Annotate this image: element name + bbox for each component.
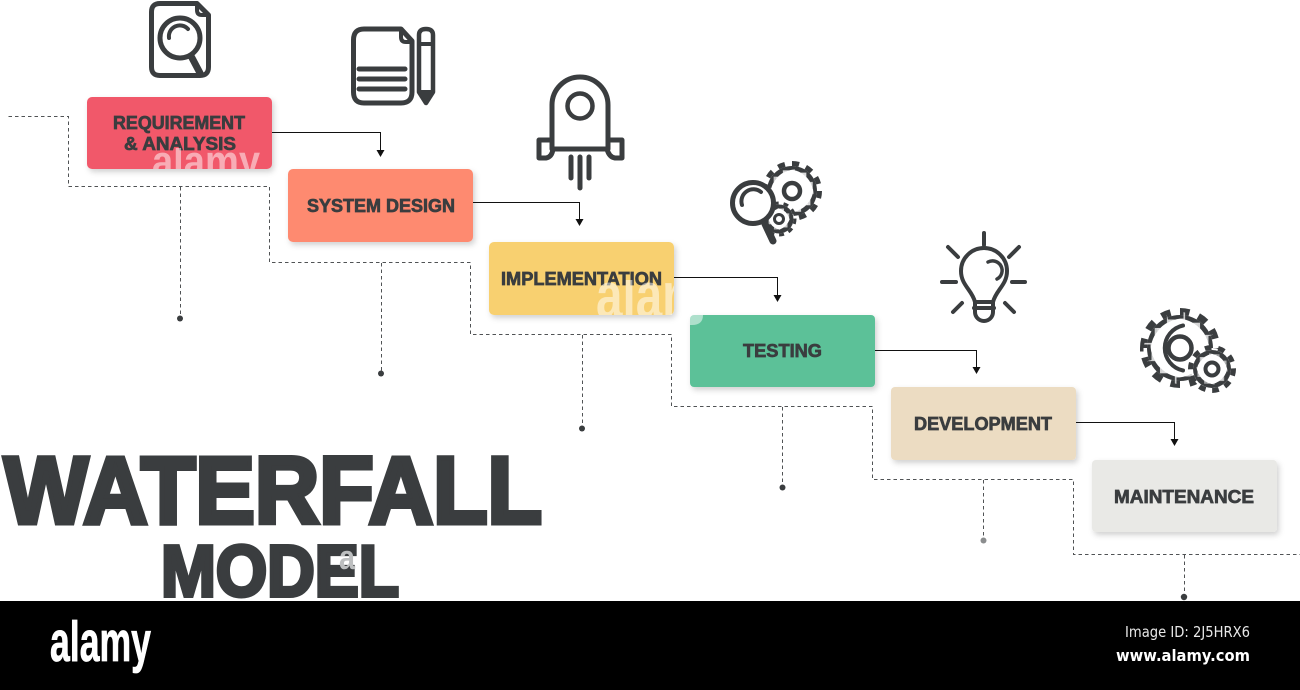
- panel: requirement and analysis: [86, 97, 276, 174]
- panel: system design: [288, 169, 473, 242]
- panel: requirement and analysis: REQUIREMENT: [113, 113, 245, 133]
- panel: development: DEVELOPMENT: [914, 414, 1052, 434]
- title line: model: MODEL: [161, 532, 399, 612]
- panel: development: [891, 387, 1076, 460]
- title: [4, 438, 542, 612]
- icon: gears: [1144, 312, 1234, 390]
- footer logo: alamy: [50, 610, 151, 674]
- stage 1 dashed drop line with dot: [177, 187, 183, 322]
- stage 4 dashed drop line with dot: [780, 407, 786, 490]
- arrow: testing to development: [875, 350, 980, 374]
- icon: magnifier with gears: [732, 164, 820, 241]
- stage 2 dashed drop line with dot: [378, 263, 384, 376]
- panel: testing: [690, 315, 875, 387]
- arrow: requirement to system design: [272, 132, 384, 157]
- footer url: www.alamy.com: [1116, 646, 1250, 665]
- panel: requirement and analysis: alamy: [152, 137, 260, 186]
- stage 5 dashed drop line with dot: [980, 480, 986, 544]
- panel: maintenance: [1092, 460, 1277, 532]
- panel: maintenance: MAINTENANCE: [1114, 487, 1254, 507]
- footer bar: [0, 601, 1300, 690]
- icon: rocket: [539, 77, 622, 188]
- icon: light bulb: [942, 233, 1025, 321]
- arrow: implementation to testing: [674, 278, 782, 302]
- watermark letter: a: [339, 539, 356, 577]
- panel: system design: SYSTEM DESIGN: [307, 196, 455, 216]
- dashed staircase connector: [8, 116, 1300, 554]
- stage 6 dashed drop line with dot: [1181, 555, 1187, 600]
- icon: document with pencil: [354, 29, 433, 103]
- panel: requirement and analysis: & ANALYSIS: [124, 134, 236, 154]
- stage 3 dashed drop line with dot: [579, 335, 585, 432]
- panel: implementation: [488, 242, 678, 320]
- arrow: development to maintenance: [1076, 422, 1178, 446]
- panel: testing: TESTING: [743, 341, 822, 361]
- image id: Image ID: 2J5HRX6: [1125, 623, 1250, 641]
- arrow: system design to implementation: [473, 202, 584, 226]
- panel: implementation: IMPLEMENTATION: [501, 269, 662, 289]
- icon: document with magnifier: [152, 4, 208, 76]
- title line: waterfall: WATERFALL: [4, 438, 542, 544]
- panel: implementation: alamy: [596, 258, 731, 332]
